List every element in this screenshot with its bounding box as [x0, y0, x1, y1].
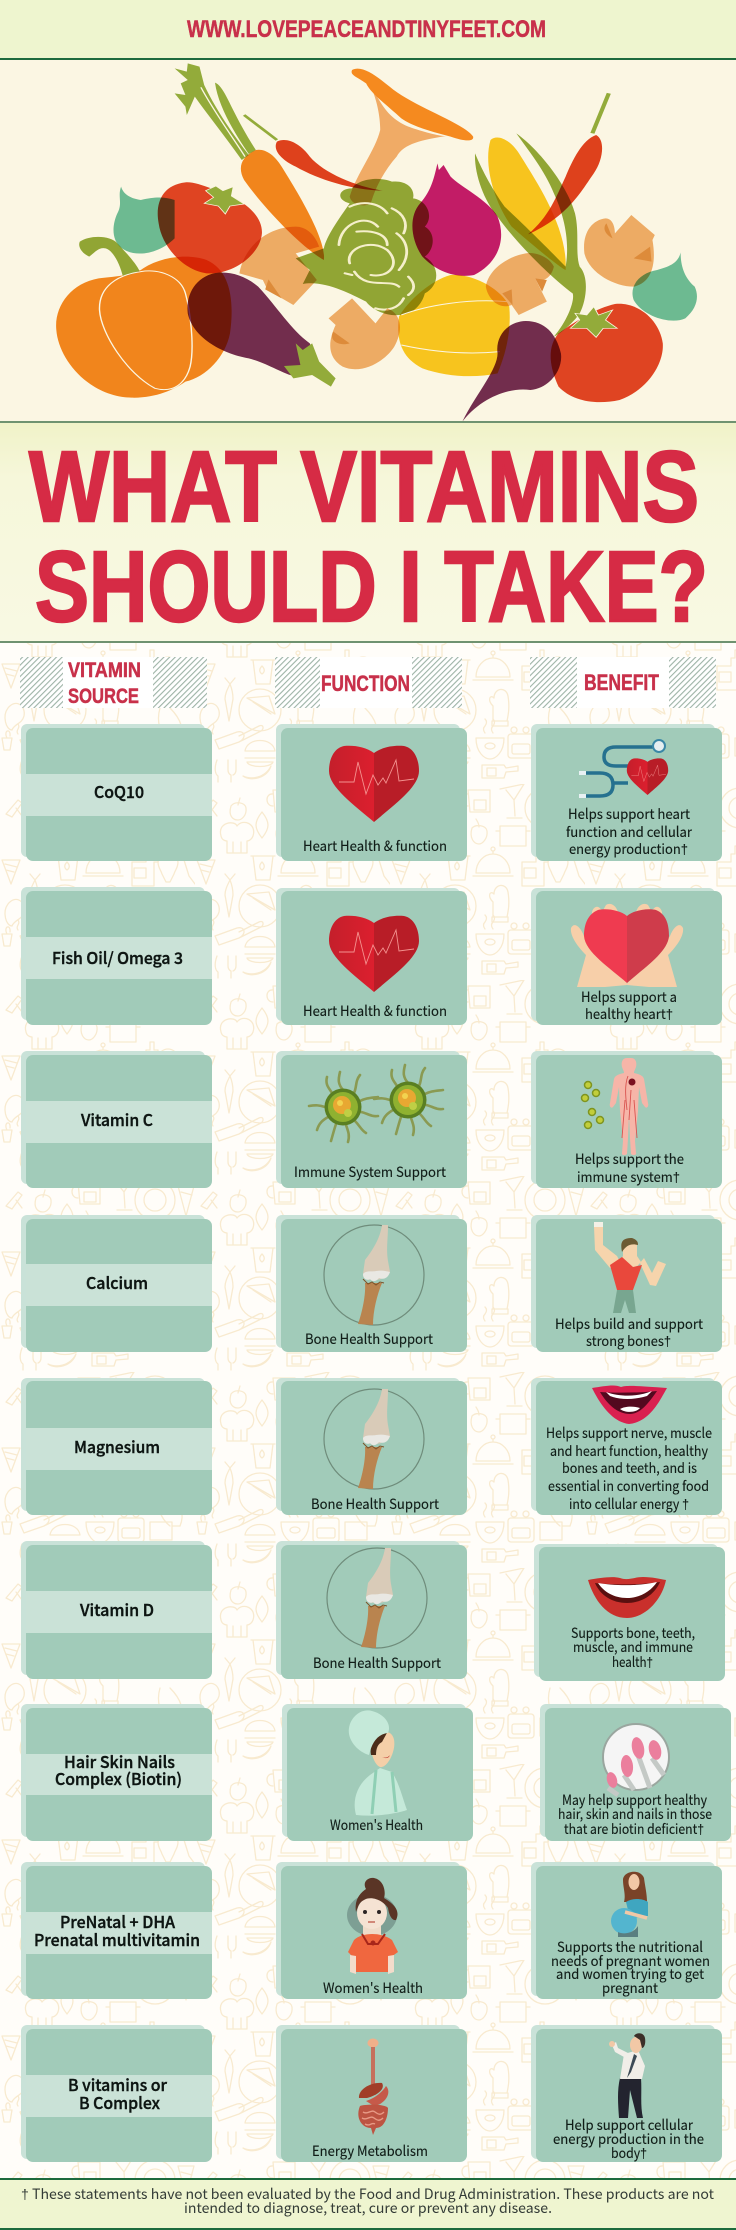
icon: laughing mouth [592, 1385, 667, 1424]
title band [0, 423, 736, 643]
icon: painted nails [603, 1724, 669, 1795]
row 9: benefit: energy production in the [553, 2129, 704, 2149]
icon: red onion [412, 163, 501, 276]
column heading: function: FUNCTION [321, 671, 410, 696]
website header band [0, 0, 736, 60]
icon: teal onion left [114, 187, 175, 254]
row 4: calcium source: Calcium [86, 1270, 148, 1294]
row 2: benefit [531, 888, 722, 1025]
icon: right tomato [551, 304, 663, 402]
row 1: benefit: energy production† [569, 839, 688, 859]
icon: yellow pepper [398, 275, 510, 376]
footer disclaimer: † These statements have not been evaluated by the Food and Drug Administration. These products are not [21, 2184, 715, 2204]
row 4: calcium source [21, 1215, 212, 1352]
row 3: function [276, 1051, 467, 1188]
column heading: benefit [530, 657, 716, 708]
row 9: benefit: body† [611, 2143, 647, 2163]
icon: bone [324, 1225, 424, 1325]
row 6: benefit: Supports bone, teeth, [571, 1623, 695, 1643]
icon: top right mushroom [584, 215, 655, 287]
row 7: function [282, 1704, 473, 1841]
icon: big mushroom [350, 69, 473, 205]
row 7: benefit [540, 1704, 731, 1841]
row 5: benefit: Helps support nerve, muscle [546, 1423, 712, 1443]
row 5: magnesium source [21, 1378, 212, 1515]
row 8: prenatal source: Prenatal multivitamin [34, 1927, 200, 1951]
row 7: function: Women's Health [330, 1815, 423, 1835]
icon: eggplant [187, 273, 336, 387]
row 6: benefit: muscle, and immune [573, 1637, 693, 1657]
icon: bone [324, 1389, 424, 1489]
icon: beetroot [462, 321, 561, 422]
row 8: benefit: needs of pregnant women [551, 1951, 710, 1971]
icon: digestive system [358, 2038, 388, 2135]
column heading: benefit: BENEFIT [584, 670, 659, 695]
row 2: fish oil source [21, 887, 212, 1025]
row 8: benefit [531, 1862, 722, 1999]
row 9: benefit [531, 2025, 722, 2163]
row 8: benefit: Supports the nutritional [557, 1937, 703, 1957]
row 7: benefit: hair, skin and nails in those [558, 1804, 712, 1824]
row 7: biotin source [21, 1704, 212, 1841]
row 5: benefit: and heart function, healthy [550, 1441, 709, 1461]
row 5: benefit [531, 1378, 722, 1515]
row 1: benefit [531, 724, 722, 861]
row 7: biotin source: Complex (Biotin) [55, 1766, 182, 1790]
row 9: benefit: Help support cellular [565, 2115, 694, 2135]
icon: left tomato [158, 182, 262, 273]
icon: middle right mushroom [486, 253, 554, 315]
row 2: benefit: healthy heart† [585, 1004, 673, 1024]
row 6: vitamin D source [21, 1541, 212, 1679]
row 5: benefit: bones and teeth, and is [562, 1458, 697, 1478]
icon: heart [329, 746, 419, 822]
row 7: benefit: that are biotin deficient† [564, 1819, 704, 1839]
icon: woman in towel [349, 1710, 407, 1816]
row 5: magnesium source: Magnesium [74, 1434, 160, 1458]
icon: carrot [175, 63, 324, 260]
row 1: function [276, 724, 467, 861]
row 4: benefit: strong bones† [586, 1331, 671, 1351]
row 3: benefit: Helps support the [575, 1149, 684, 1169]
row 8: benefit: and women trying to get [556, 1964, 705, 1984]
row 1: CoQ10 source: CoQ10 [94, 779, 144, 803]
row 8: prenatal source [21, 1862, 212, 1999]
row 8: function [276, 1862, 467, 1999]
footer disclaimer: intended to diagnose, treat, cure or prevent any disease. [184, 2198, 552, 2218]
row 3: vitamin C source [21, 1051, 212, 1188]
website url: WWW.LOVEPEACEANDTINYFEET.COM [187, 16, 546, 43]
row 3: benefit: immune system† [577, 1167, 680, 1187]
icon: smiling mouth [588, 1577, 666, 1618]
row 4: function: Bone Health Support [305, 1329, 434, 1349]
row 8: function: Women's Health [323, 1978, 423, 1998]
row 1: benefit: Helps support heart [568, 804, 691, 824]
vegetables illustration [0, 60, 736, 423]
icon: teal onion right [632, 252, 697, 321]
icon: hands holding heart [571, 904, 683, 987]
row 1: CoQ10 source [21, 724, 212, 861]
row 1: function: Heart Health & function [303, 836, 447, 856]
row 9: function: Energy Metabolism [312, 2141, 428, 2161]
row 6: function: Bone Health Support [313, 1653, 442, 1673]
icon: immune cells [309, 1065, 443, 1142]
row 9: B vitamins source [21, 2025, 212, 2162]
row 8: benefit: pregnant [602, 1978, 659, 1998]
icon: pregnant woman [611, 1872, 648, 1937]
row 7: benefit: May help support healthy [562, 1790, 708, 1810]
column heading: function [275, 657, 462, 708]
icon: left mushroom [239, 227, 319, 305]
row 3: vitamin C source: Vitamin C [80, 1107, 153, 1131]
icon: stethoscope and heart [579, 740, 668, 796]
row 5: function: Bone Health Support [311, 1494, 440, 1514]
icon: top chili [244, 115, 383, 191]
row 3: function: Immune System Support [294, 1162, 447, 1182]
column heading: vitamin source [20, 657, 207, 708]
row 3: benefit [531, 1051, 722, 1188]
icon: muscular man [594, 1222, 666, 1313]
row 7: biotin source: Hair Skin Nails [64, 1749, 175, 1773]
icon: broccoli [296, 179, 436, 315]
icon: right chili [528, 93, 609, 234]
row 9: B vitamins source: B vitamins or [68, 2072, 167, 2096]
row 6: vitamin D source: Vitamin D [79, 1597, 154, 1621]
row 2: function [276, 888, 467, 1025]
row 9: function [276, 2025, 467, 2162]
column heading: vitamin source: SOURCE [68, 685, 139, 708]
row 2: benefit: Helps support a [581, 987, 677, 1007]
icon: bone [327, 1548, 427, 1648]
row 2: fish oil source: Fish Oil/ Omega 3 [52, 945, 183, 969]
icon: woman with bun [347, 1878, 398, 1974]
row 2: function: Heart Health & function [303, 1001, 447, 1021]
icon: bottom mushroom [329, 298, 400, 369]
icon: heart [329, 916, 419, 992]
icon: corn [475, 133, 586, 337]
icon: businessman [609, 2033, 645, 2118]
row 6: benefit: health† [612, 1652, 653, 1672]
row 4: benefit: Helps build and support [555, 1314, 704, 1334]
row 4: benefit [531, 1215, 722, 1352]
row 8: prenatal source: PreNatal + DHA [60, 1909, 175, 1933]
row 4: function [276, 1215, 467, 1352]
column heading: vitamin source: VITAMIN [68, 659, 141, 682]
row 5: benefit: into cellular energy † [569, 1494, 689, 1514]
row 1: benefit: function and cellular [566, 822, 693, 842]
row 5: benefit: essential in converting food [548, 1476, 709, 1496]
row 5: function [276, 1378, 467, 1515]
icon: orange bell pepper [56, 237, 232, 398]
footer disclaimer [0, 2178, 736, 2230]
row 9: B vitamins source: B Complex [79, 2090, 161, 2114]
icon: circulatory body and cells [582, 1058, 648, 1155]
row 6: benefit [534, 1544, 725, 1681]
row 6: function [276, 1541, 467, 1679]
